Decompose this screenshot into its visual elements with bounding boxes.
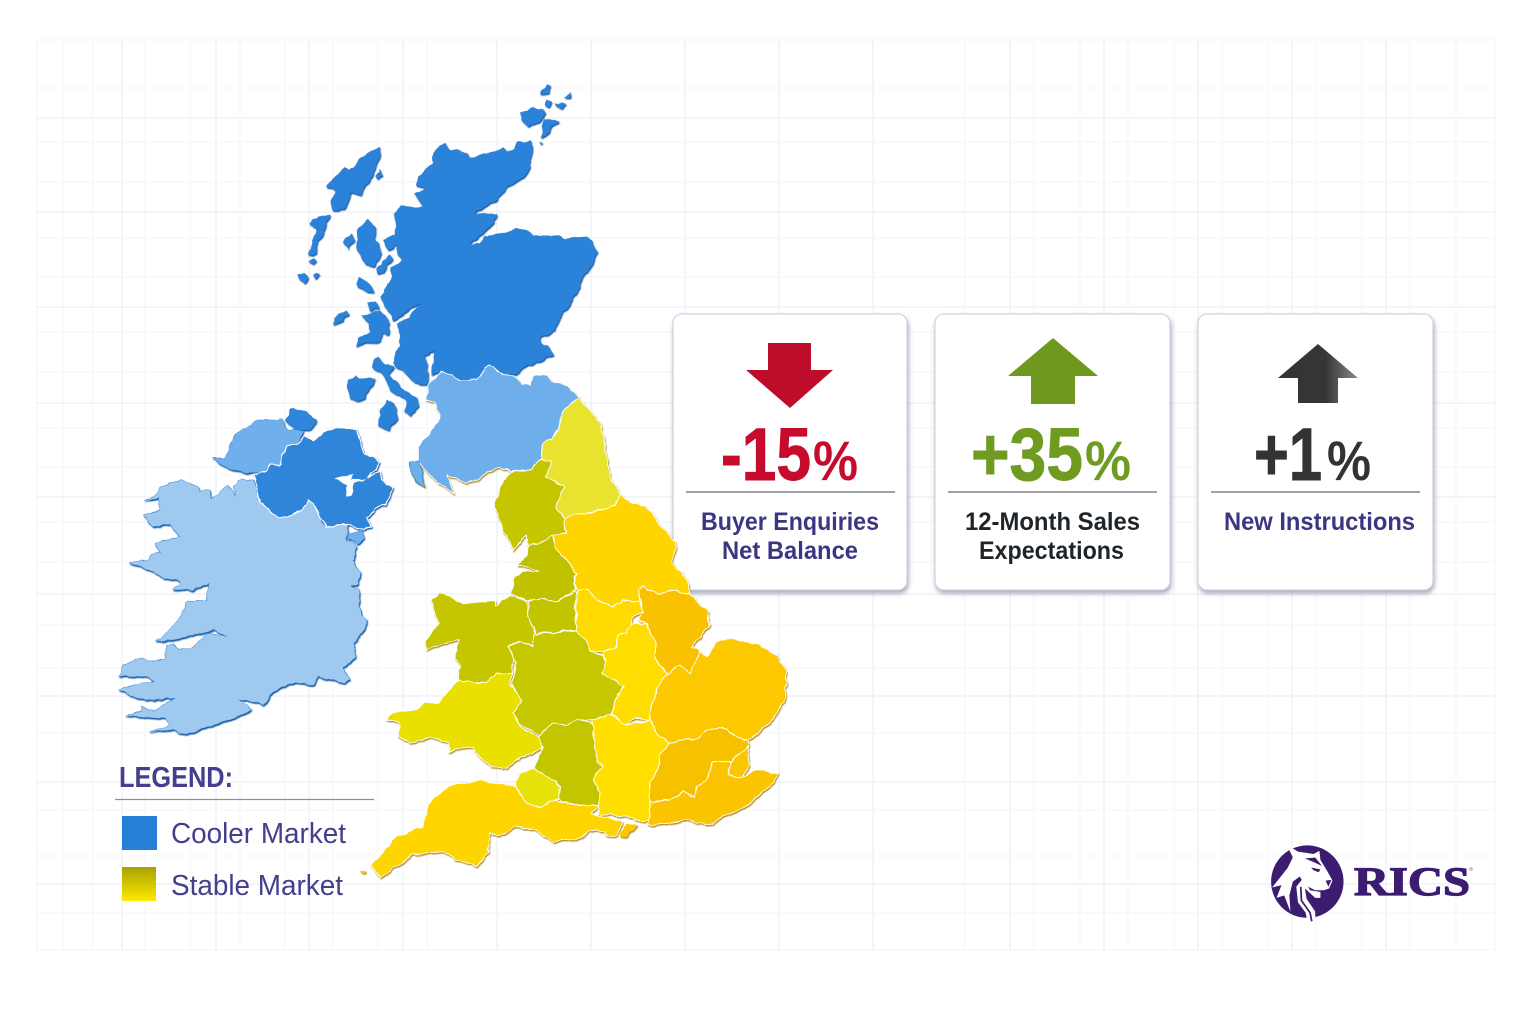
map: Scotland north	[298, 85, 597, 431]
swatch: stable market	[122, 867, 156, 901]
value: +35%: +35	[971, 413, 1083, 496]
region: Hampshire and Berkshire	[592, 715, 670, 822]
map: Ireland	[118, 408, 393, 735]
panel: sales expectations card	[935, 314, 1170, 590]
region: Oxfordshire and Northamptonshire	[602, 623, 668, 725]
value: +1%: +1	[1254, 413, 1322, 496]
region: Lincolnshire	[638, 587, 709, 673]
registered mark	[1469, 867, 1473, 871]
region: Northern Ireland	[253, 408, 393, 545]
region: Shropshire	[528, 592, 577, 634]
region: South Wales	[386, 673, 543, 768]
logo mark: lion head	[1271, 845, 1344, 923]
region: Thames estuary	[728, 747, 748, 778]
label: 12-month sales expectations	[965, 508, 1140, 565]
map: England and Wales regions	[361, 365, 787, 878]
label: buyer enquiries net balance: Net Balance	[722, 537, 858, 565]
region: North Wales	[425, 593, 533, 683]
icon: green up arrow	[1008, 338, 1098, 404]
label: 12-month sales expectations: Expectations	[979, 537, 1124, 565]
region: West Midlands	[508, 630, 623, 735]
swatch: cooler market	[122, 816, 157, 850]
region: East Midlands	[577, 590, 643, 652]
legend	[115, 762, 374, 902]
region: Lancashire and Cheshire	[512, 535, 576, 602]
icon: dark up arrow	[1278, 344, 1358, 403]
region: Kent and Sussex	[648, 762, 777, 825]
region: Donegal	[212, 418, 303, 473]
region: North East	[542, 397, 621, 517]
region: Cumbria	[494, 458, 567, 550]
region: Republic of Ireland	[118, 478, 366, 735]
value: -15%: %	[813, 429, 858, 492]
value: -15%: -15	[721, 413, 811, 496]
logo wordmark: RICS	[1354, 859, 1470, 904]
value: +1%: %	[1327, 429, 1371, 492]
region: London and Surrey	[650, 727, 750, 802]
panel: buyer enquiries card	[673, 314, 907, 590]
legend label: cooler market: Cooler Market	[171, 818, 346, 850]
region: South West	[361, 780, 637, 878]
label: buyer enquiries net balance	[701, 508, 879, 565]
label: 12-month sales expectations: 12-Month Sales	[965, 508, 1140, 536]
region: Southern Scotland	[408, 365, 578, 493]
label: new instructions: New Instructions	[1224, 508, 1415, 536]
value: +35%: %	[1085, 429, 1131, 492]
panel: new instructions card	[1198, 314, 1433, 590]
region: Bristol and Somerset	[516, 768, 560, 808]
icon: red down arrow	[746, 343, 833, 408]
region: Yorkshire	[553, 495, 690, 607]
logo: RICS	[1271, 845, 1473, 923]
region: East Anglia	[650, 638, 787, 744]
legend label: stable market: Stable Market	[171, 870, 343, 902]
label: buyer enquiries net balance: Buyer Enquiries	[701, 508, 879, 536]
legend heading: LEGEND:	[119, 762, 233, 794]
region: Wiltshire and Gloucestershire	[533, 720, 602, 806]
